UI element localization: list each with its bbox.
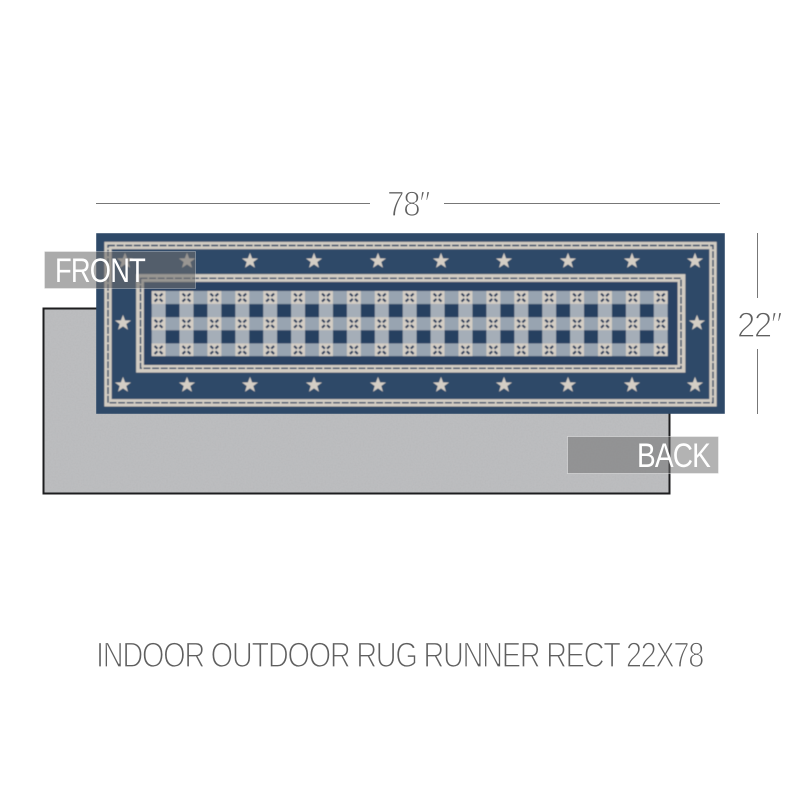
buffalo check panel: [152, 291, 668, 356]
stars: [115, 253, 705, 392]
label: front: FRONT: [55, 252, 145, 290]
inner border band: [140, 278, 682, 369]
height dimension: 22 inches: 22″: [737, 306, 782, 345]
label: back: BACK: [637, 437, 711, 475]
label: back: [568, 436, 718, 475]
width dimension: 78 inches: 78″: [387, 185, 430, 224]
inner navy field: [144, 282, 678, 365]
outer border band: [108, 246, 713, 403]
rug back: [44, 308, 670, 494]
rug front: [96, 233, 725, 414]
